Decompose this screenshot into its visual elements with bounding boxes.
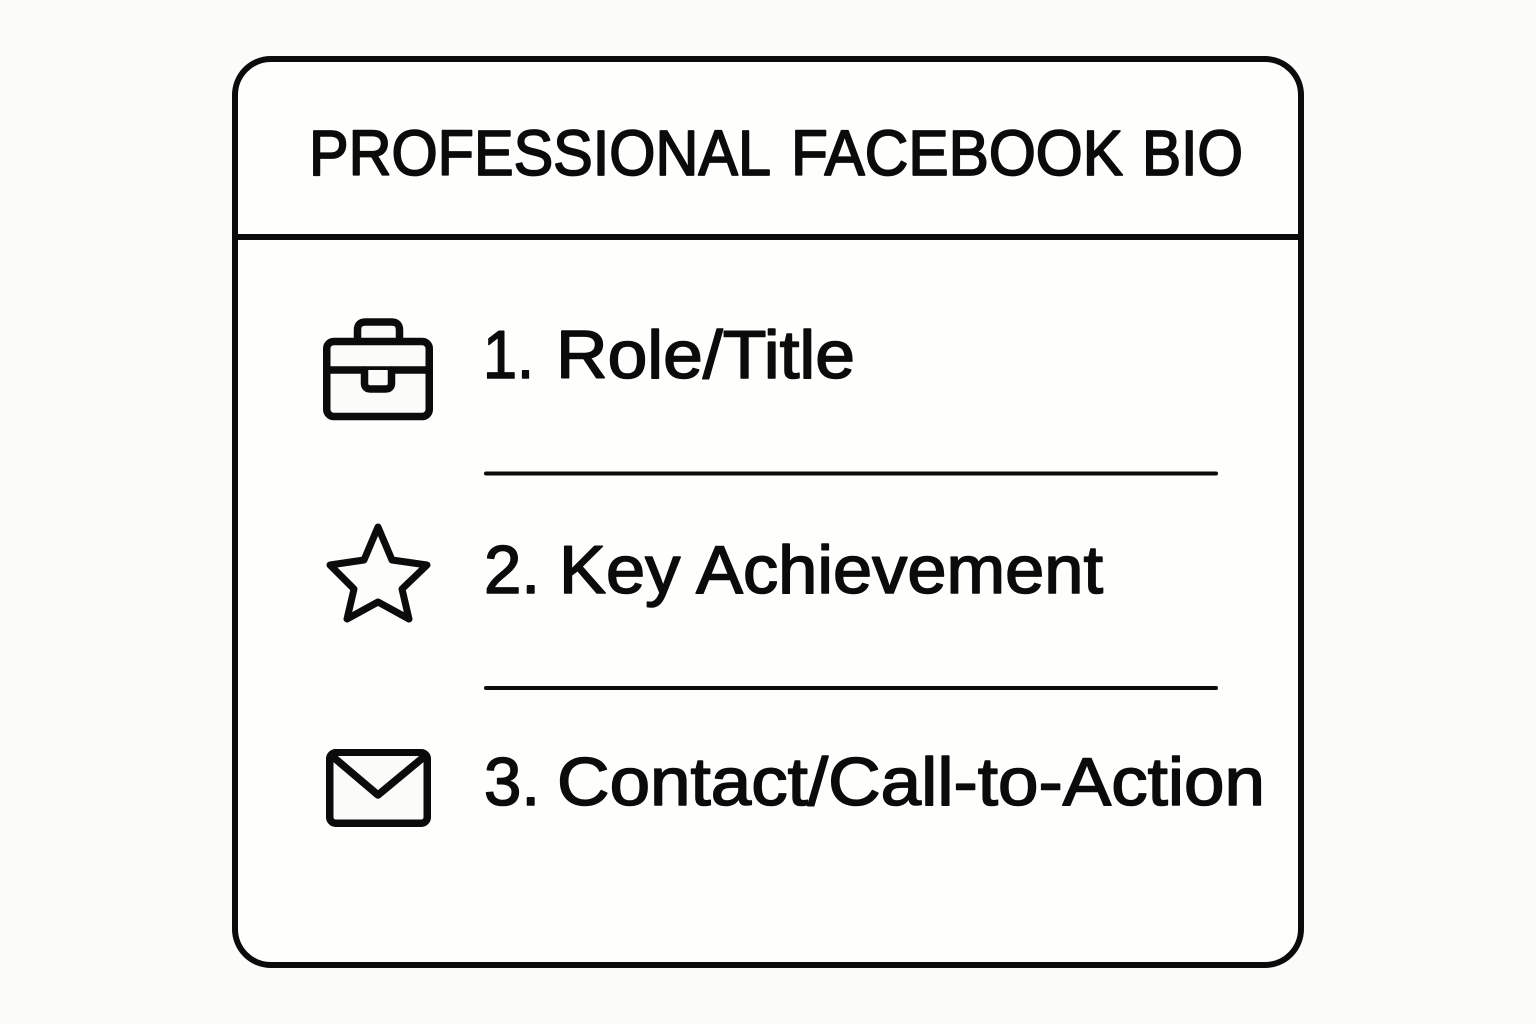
text: role/title: Role/Title: [556, 317, 855, 393]
title: [309, 117, 1243, 189]
panel: bio card: [235, 59, 1301, 965]
title: BIO: [1142, 117, 1243, 189]
title: PROFESSIONAL: [309, 117, 771, 189]
icon: star: [330, 527, 427, 619]
text: key achievement: 2.: [484, 532, 540, 608]
text: role/title: 1.: [483, 317, 534, 393]
title: FACEBOOK: [791, 117, 1123, 189]
icon: envelope: [330, 753, 427, 823]
text: key achievement: Key Achievement: [559, 532, 1103, 608]
text: contact/call-to-action: 3.: [484, 744, 540, 820]
icon: briefcase: [327, 322, 429, 416]
text: contact/call-to-action: Contact/Call-to-Action: [557, 744, 1265, 820]
